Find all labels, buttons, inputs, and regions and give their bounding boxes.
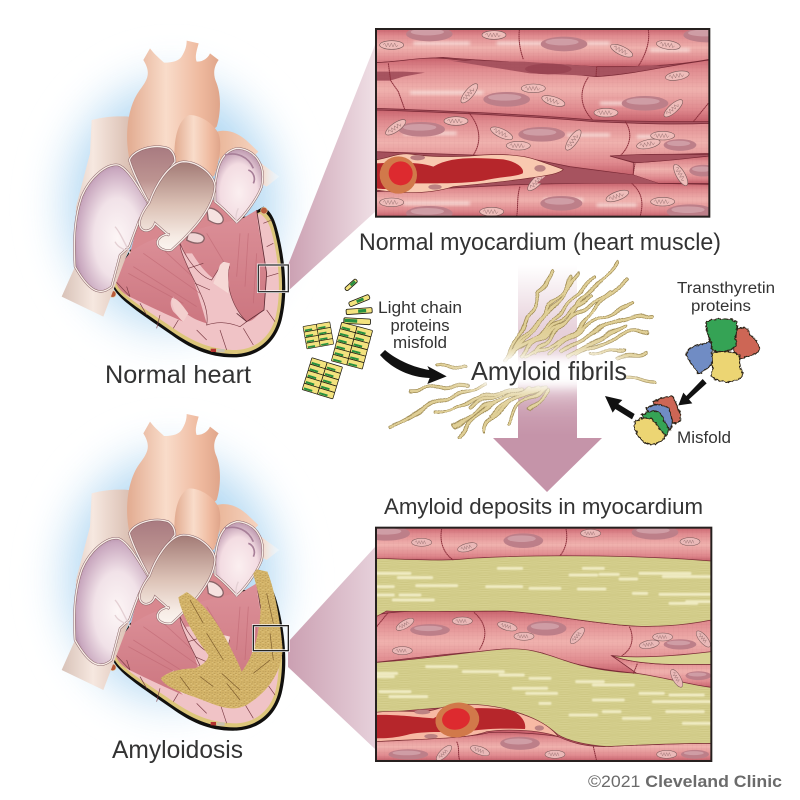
lower gap wedge [536,173,658,184]
label: transthyretin proteins [677,280,775,315]
heading: amyloidosis: Amyloidosis [112,736,243,764]
heart: normal [62,41,288,357]
capillary with red blood cell [376,154,563,194]
arrow: tetramer to misfold [678,379,707,405]
muscle fibers [376,528,711,761]
intercalated discs [388,30,708,217]
lens gap [610,154,709,163]
amyloid streaks [377,568,710,723]
panel: amyloid deposits in myocardium [363,525,713,763]
label: light chain proteins misfold: Light chain [378,299,462,317]
heading: normal myocardium: Normal myocardium (heart muscle) [359,229,721,256]
light chain proteins [302,279,373,399]
muscle fibers [376,29,709,217]
label: misfold: Misfold [677,429,731,447]
copyright: ©2021 Cleveland Clinic [588,773,782,791]
amyloid deposits [376,556,711,747]
label: transthyretin proteins: proteins [691,298,751,315]
intercalated discs [377,529,637,761]
heading: normal heart: Normal heart [105,361,251,389]
streaks [403,43,690,205]
heart: amyloidosis [62,414,288,731]
heading: amyloid fibrils: Amyloid fibrils [471,356,627,386]
mitochondria [412,538,432,546]
heading: amyloid deposits: Amyloid deposits in myocardium [384,494,703,519]
panel: normal myocardium [376,27,730,221]
nuclei [406,30,452,42]
label: light chain proteins misfold: misfold [393,334,447,352]
mitochondria [482,31,506,39]
central fade arrow [493,265,602,492]
capillary with red blood cell [376,700,558,742]
transthyretin protein tetramer [687,319,759,382]
arrow: light chain to fibrils [380,350,447,384]
nuclei [377,528,410,541]
misfolded transthyretin [635,396,681,444]
label: light chain proteins misfold [378,299,462,352]
label: transthyretin proteins: Transthyretin [677,280,775,297]
connector wedge: top zoom [288,45,375,291]
background glows [42,55,302,728]
label: light chain proteins misfold: proteins [390,317,450,335]
arrow: misfold to fibrils [605,396,635,419]
connector wedge: bottom zoom [288,547,375,749]
fibril label halo [456,357,640,387]
amyloid fibrils illustration [389,262,655,435]
